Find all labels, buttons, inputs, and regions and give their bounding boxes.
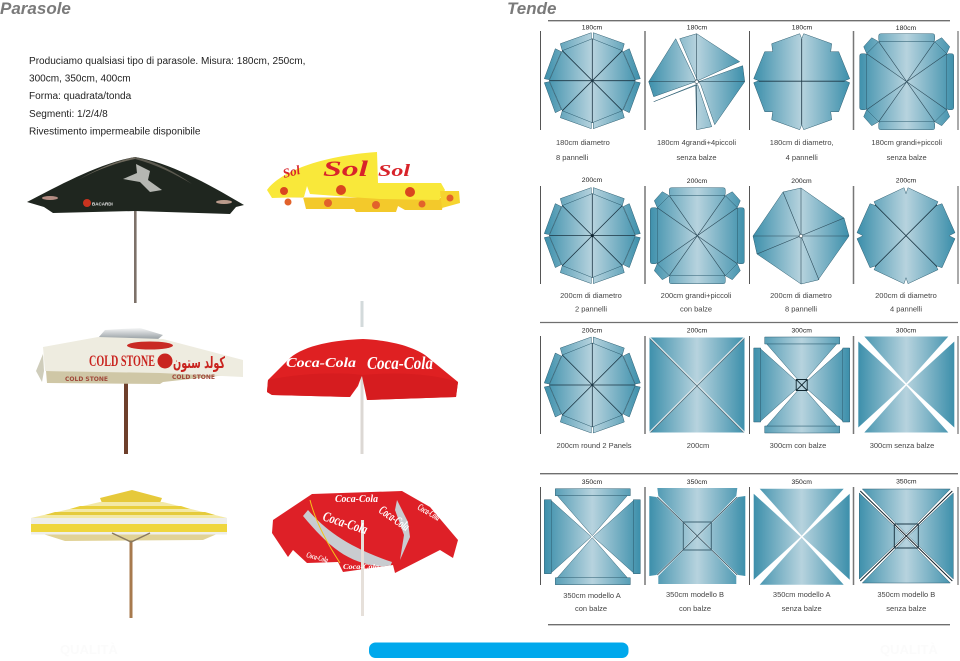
diagram: 180cm 4 grandi + 4 piccoli senza balze: 180cm 4grandi+4piccoli [657, 138, 736, 147]
diagram: 200cm di diametro 2 pannelli: 200cm [582, 177, 603, 184]
photo: yellow striped parasol [31, 490, 227, 618]
diagram: 350cm modello B con balze: con balze [679, 604, 711, 613]
footer: faint label right: QUALITÀ [880, 642, 938, 657]
diagram: 200cm round 2 panels: 200cm round 2 Panels [556, 441, 632, 450]
diagram: 180cm grandi + piccoli senza balze [860, 25, 954, 162]
diagram: 200cm grandi + piccoli con balze [650, 178, 744, 314]
diagram: 300cm senza balze: 300cm senza balze [870, 441, 934, 450]
diagram: 180cm diametro 8 pannelli: 180cm diametro [556, 138, 610, 147]
photo: yellow Sol parasol: Sol [281, 162, 302, 181]
diagram: 350cm modello A senza balze: senza balze [782, 604, 822, 613]
text block: product description: Produciamo qualsiasi tipo di parasole. Misura: 180cm, 250cm, [29, 56, 305, 67]
diagram: 200cm di diametro 8 pannelli: 200cm di diametro [770, 291, 832, 300]
photo: black parasol: BACARDI [92, 202, 113, 206]
diagram: 200cm square [650, 328, 744, 450]
photo: yellow Sol parasol: Sol [378, 161, 410, 180]
photo: Cold Stone parasol: COLD STONE [172, 374, 215, 381]
photo: Cold Stone parasol: COLD STONE [65, 376, 108, 383]
photo: red Coca-Cola bottle parasol: Coca-Cola [335, 494, 378, 505]
diagram: 200cm grandi + piccoli con balze: 200cm grandi+piccoli [661, 291, 732, 300]
photo: black parasol [27, 157, 244, 303]
diagram: 180cm grandi + piccoli senza balze: senza balze [887, 153, 927, 162]
diagram: 300cm con balze: 300cm con balze [770, 441, 826, 450]
diagram: 350cm modello A senza balze: 350cm [791, 479, 812, 486]
text block: product description: 300cm, 350cm, 400cm [29, 74, 131, 84]
photo: red Coca-Cola bottle parasol: Coca-Cola [305, 550, 329, 565]
diagram: 200cm di diametro 8 pannelli [753, 178, 849, 314]
photo: red Coca-Cola bottle parasol [272, 491, 458, 616]
diagram: 300cm senza balze: 300cm [896, 328, 917, 334]
diagram: 350cm modello B con balze [649, 479, 745, 613]
diagram: 180cm 4 grandi + 4 piccoli senza balze: senza balze [676, 153, 717, 162]
diagram: 350cm modello A senza balze: 350cm modello A [773, 590, 830, 599]
photo: yellow Sol parasol: Sol [323, 156, 369, 181]
diagram: 180cm di diametro 4 pannelli: 180cm [792, 24, 813, 32]
diagram: 200cm grandi + piccoli con balze: 200cm [687, 178, 708, 185]
photo: yellow Sol parasol [267, 152, 460, 212]
text block: product description: Segmenti: 1/2/4/8 [29, 109, 108, 120]
text block: product description: Forma: quadrata/tonda [29, 91, 132, 102]
photo: Cold Stone parasol: COLD STONE [89, 353, 155, 370]
diagram: 200cm di diametro 2 pannelli: 200cm di diametro [560, 291, 622, 300]
diagram: 200cm di diametro 4 pannelli: 200cm [896, 178, 917, 184]
text block: product description: Rivestimento impermeabile disponibile [29, 126, 201, 138]
diagram: 350cm modello A con balze: 350cm [582, 479, 603, 486]
diagram: 350cm modello A con balze: con balze [575, 604, 607, 613]
diagram: 180cm diametro 8 pannelli [544, 24, 640, 162]
diagram: 200cm di diametro 4 pannelli [857, 178, 955, 314]
diagram: 180cm 4 grandi + 4 piccoli senza balze: 180cm [687, 24, 708, 32]
footer: faint label left: QUALITÀ [60, 642, 118, 657]
diagram: 350cm modello B con balze: 350cm modello B [666, 590, 724, 599]
diagram: 200cm di diametro 4 pannelli: 200cm di diametro [875, 291, 937, 300]
diagram: 200cm square: 200cm [687, 328, 708, 334]
diagram: 350cm modello A con balze: 350cm modello A [563, 591, 621, 600]
diagram: 180cm diametro 8 pannelli: 8 pannelli [556, 153, 588, 162]
diagram: 350cm modello B senza balze: 350cm modello B [877, 590, 935, 599]
diagram: 180cm di diametro 4 pannelli: 180cm di diametro, [770, 138, 834, 147]
diagram: 200cm grandi + piccoli con balze: con balze [680, 304, 712, 314]
diagram: 350cm modello A con balze [544, 479, 640, 613]
diagram: 300cm senza balze [858, 328, 954, 450]
diagram: 200cm round 2 panels [544, 328, 640, 450]
photo: red Coca-Cola parasol: Coca-Cola [367, 353, 433, 373]
photo: Cold Stone parasol [36, 328, 243, 454]
diagram: 350cm modello B senza balze: senza balze [886, 604, 926, 613]
photo: red Coca-Cola parasol: Coca-Cola [286, 356, 356, 371]
diagram: 200cm di diametro 4 pannelli: 4 pannelli [890, 304, 922, 314]
text block: product description [29, 56, 305, 138]
diagram: 200cm di diametro 8 pannelli: 200cm [791, 178, 812, 185]
photo: red Coca-Cola bottle parasol: Coca-Cola [321, 510, 369, 538]
photo: red Coca-Cola bottle parasol: Coca-Cola [343, 563, 380, 571]
diagram: 200cm square: 200cm [687, 441, 709, 450]
diagram: 200cm di diametro 8 pannelli: 8 pannelli [785, 304, 817, 314]
diagram: 180cm grandi + piccoli senza balze: 180cm grandi+piccoli [871, 138, 942, 147]
diagram: 350cm modello B senza balze [859, 478, 953, 613]
diagram: 350cm modello B con balze: 350cm [687, 479, 708, 486]
footer: blue bar [369, 642, 628, 658]
diagram: 180cm di diametro 4 pannelli: 4 pannelli [786, 153, 818, 162]
photo: red Coca-Cola bottle parasol: Coca-Cola [376, 502, 413, 534]
diagram: 180cm grandi + piccoli senza balze: 180cm [896, 25, 917, 32]
diagram: 200cm di diametro 2 pannelli [544, 177, 640, 314]
photo: red Coca-Cola bottle parasol: Coca-Cola [416, 502, 442, 524]
photo: Cold Stone parasol: كولد ستون [173, 353, 225, 372]
photo: pole fragment [360, 301, 364, 327]
photo: red Coca-Cola parasol [267, 339, 458, 454]
diagram: 350cm modello A senza balze [754, 479, 850, 613]
diagram: 350cm modello B senza balze: 350cm [896, 478, 917, 486]
diagram: 300cm con balze: 300cm [791, 328, 812, 334]
diagram: 180cm di diametro 4 pannelli [754, 24, 850, 162]
diagram: 180cm 4 grandi + 4 piccoli senza balze [649, 24, 745, 162]
diagram: 200cm round 2 panels: 200cm [582, 328, 603, 334]
diagram: 300cm con balze [754, 328, 850, 450]
diagram: 200cm di diametro 2 pannelli: 2 pannelli [575, 304, 607, 314]
diagram: 180cm diametro 8 pannelli: 180cm [582, 24, 603, 32]
